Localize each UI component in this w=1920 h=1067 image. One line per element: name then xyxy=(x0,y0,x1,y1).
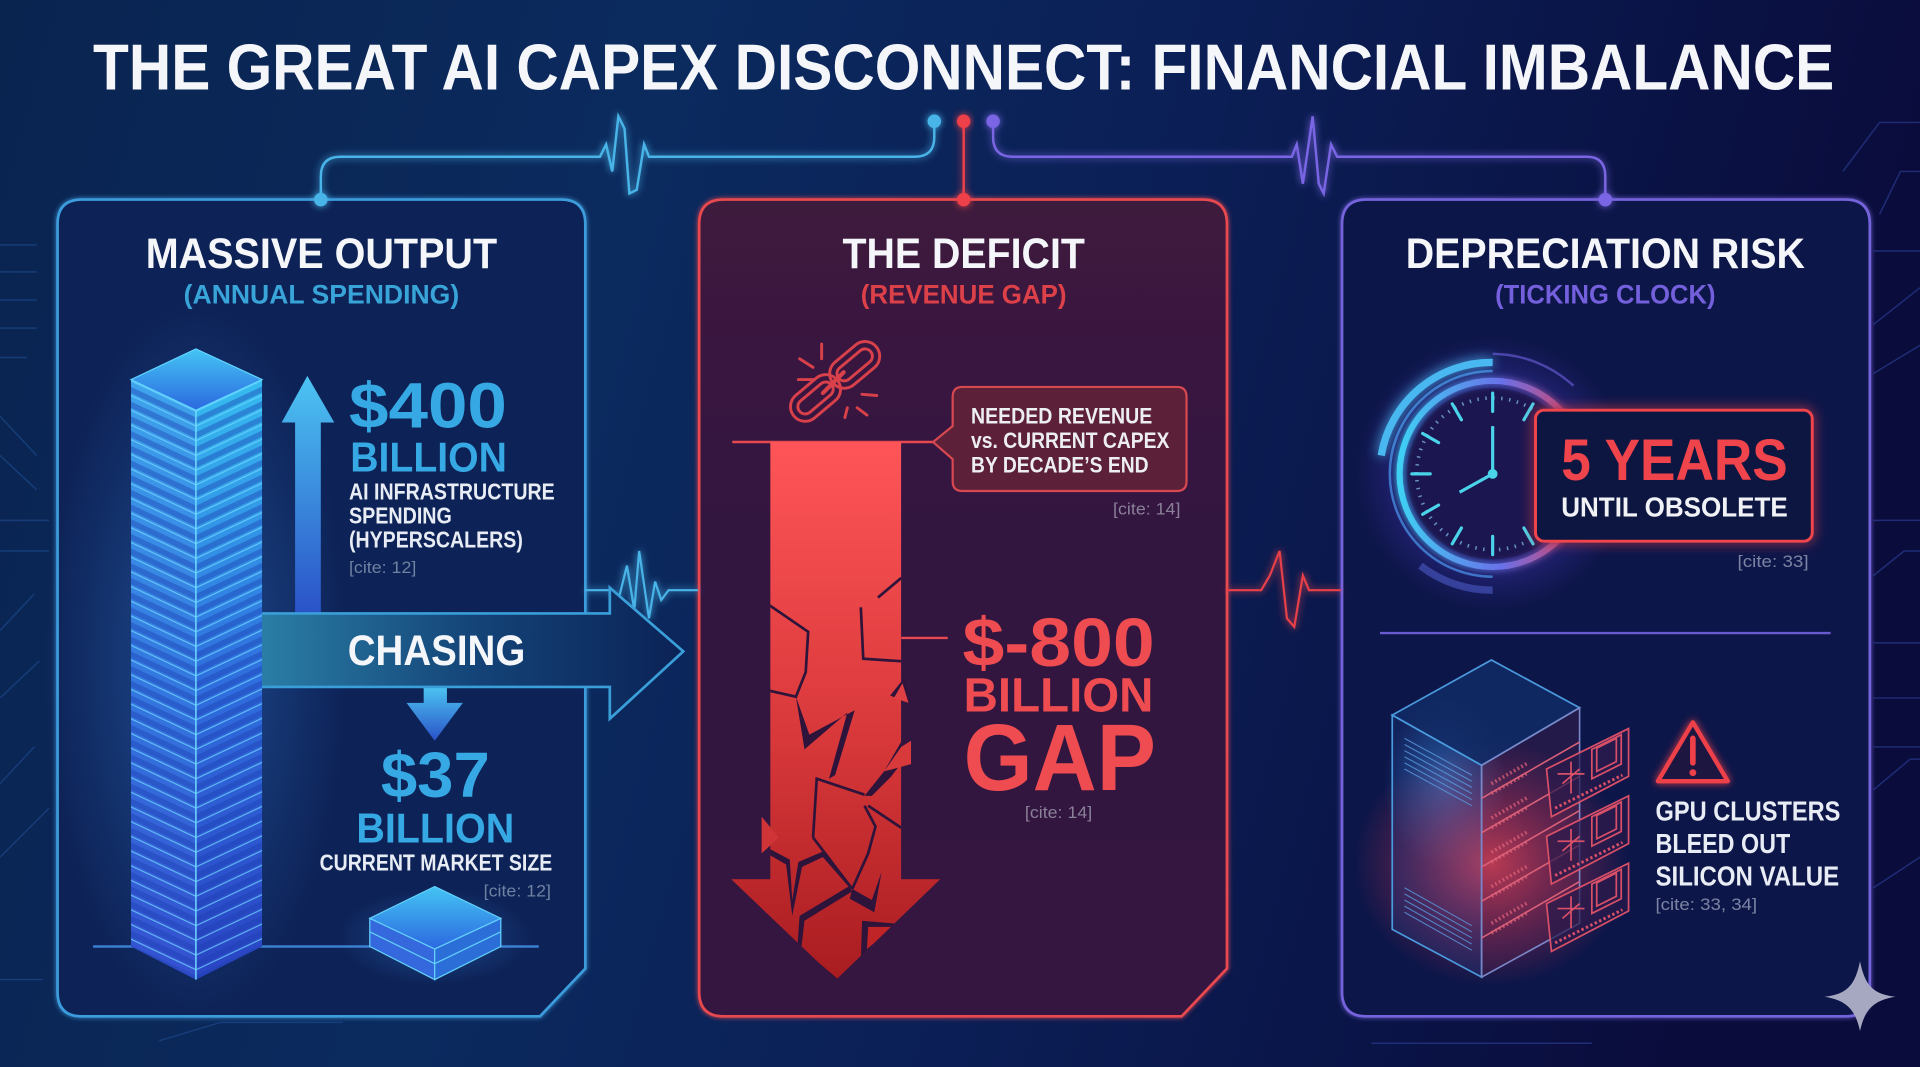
heading: the deficit: THE DEFICIT xyxy=(842,230,1085,278)
arrow: down xyxy=(407,687,463,741)
subheading: annual spending: (ANNUAL SPENDING) xyxy=(184,280,459,310)
description: gpu clusters: SILICON VALUE xyxy=(1656,860,1839,891)
heading: depreciation risk: DEPRECIATION RISK xyxy=(1406,230,1805,278)
description: gpu clusters: BLEED OUT xyxy=(1656,828,1790,859)
description: ai infrastructure spending: (HYPERSCALERS) xyxy=(349,526,523,552)
callout: five years: UNTIL OBSOLETE xyxy=(1561,492,1788,523)
ground line xyxy=(93,946,539,948)
stat: 400 billion: $400 xyxy=(349,370,507,441)
stat: 400 billion xyxy=(349,370,507,480)
arrow: chasing xyxy=(262,588,683,719)
callout: five years: 5 YEARS xyxy=(1561,428,1788,493)
connector: purple xyxy=(986,114,1612,206)
icon: clock xyxy=(1356,337,1630,611)
circuit pattern: left xyxy=(0,245,343,1041)
panel: the deficit xyxy=(699,200,1227,1016)
arrow: chasing: CHASING xyxy=(348,627,525,675)
chart: cracked red arrow xyxy=(731,442,940,980)
chart: small stack xyxy=(337,887,533,986)
description: gpu clusters: GPU CLUSTERS xyxy=(1656,795,1840,826)
stat: 37 billion: $37 xyxy=(381,740,490,811)
description: gpu clusters xyxy=(1656,795,1840,891)
icon: gpu server xyxy=(1354,660,1629,986)
panel: depreciation risk xyxy=(1342,200,1870,1016)
icon: warning triangle xyxy=(1658,722,1728,781)
callout: needed revenue: NEEDED REVENUE xyxy=(971,404,1152,429)
stat: 800 billion gap: GAP xyxy=(964,705,1156,810)
citation: [cite: 14] xyxy=(1113,499,1180,518)
heartbeat: red link xyxy=(1227,551,1341,627)
stat: 37 billion: BILLION xyxy=(356,804,514,851)
stat: 400 billion: BILLION xyxy=(350,433,507,480)
tower glow xyxy=(43,294,349,1029)
stat: 800 billion gap xyxy=(962,604,1156,810)
citation: [cite: 12] xyxy=(484,881,551,900)
citation: [cite: 33] xyxy=(1738,552,1809,571)
heading: massive output: MASSIVE OUTPUT xyxy=(146,230,497,278)
stat: 800 billion gap: BILLION xyxy=(964,669,1153,722)
description: ai infrastructure spending: SPENDING xyxy=(349,502,452,528)
callout: needed revenue: BY DECADE’S END xyxy=(971,453,1149,478)
panel: massive output xyxy=(43,200,585,1029)
icon: broken chain xyxy=(784,336,886,427)
connector: cyan xyxy=(314,114,941,206)
citation: [cite: 33, 34] xyxy=(1656,895,1757,914)
chart: tall tower xyxy=(131,349,262,980)
leader line xyxy=(901,637,948,639)
subheading: revenue gap: (REVENUE GAP) xyxy=(861,280,1067,310)
description: ai infrastructure spending xyxy=(349,479,555,552)
description: ai infrastructure spending: AI INFRASTRUCTURE xyxy=(349,479,555,505)
circuit pattern: right xyxy=(1371,122,1920,1043)
citation: [cite: 14] xyxy=(1025,803,1092,822)
stat: 37 billion xyxy=(356,740,514,851)
subheading: ticking clock: (TICKING CLOCK) xyxy=(1495,280,1716,310)
callout: needed revenue: vs. CURRENT CAPEX xyxy=(971,428,1170,453)
callout: five years xyxy=(1536,410,1812,541)
connector: red xyxy=(957,114,970,206)
description: current market size: CURRENT MARKET SIZE xyxy=(320,850,552,876)
icon: sparkle mark xyxy=(1824,961,1896,1031)
citation: [cite: 12] xyxy=(349,558,416,577)
callout: needed revenue xyxy=(732,387,1187,491)
stat: 800 billion gap: $-800 xyxy=(962,604,1155,681)
arrow: up xyxy=(282,376,334,613)
heartbeat: cyan link xyxy=(585,551,698,618)
